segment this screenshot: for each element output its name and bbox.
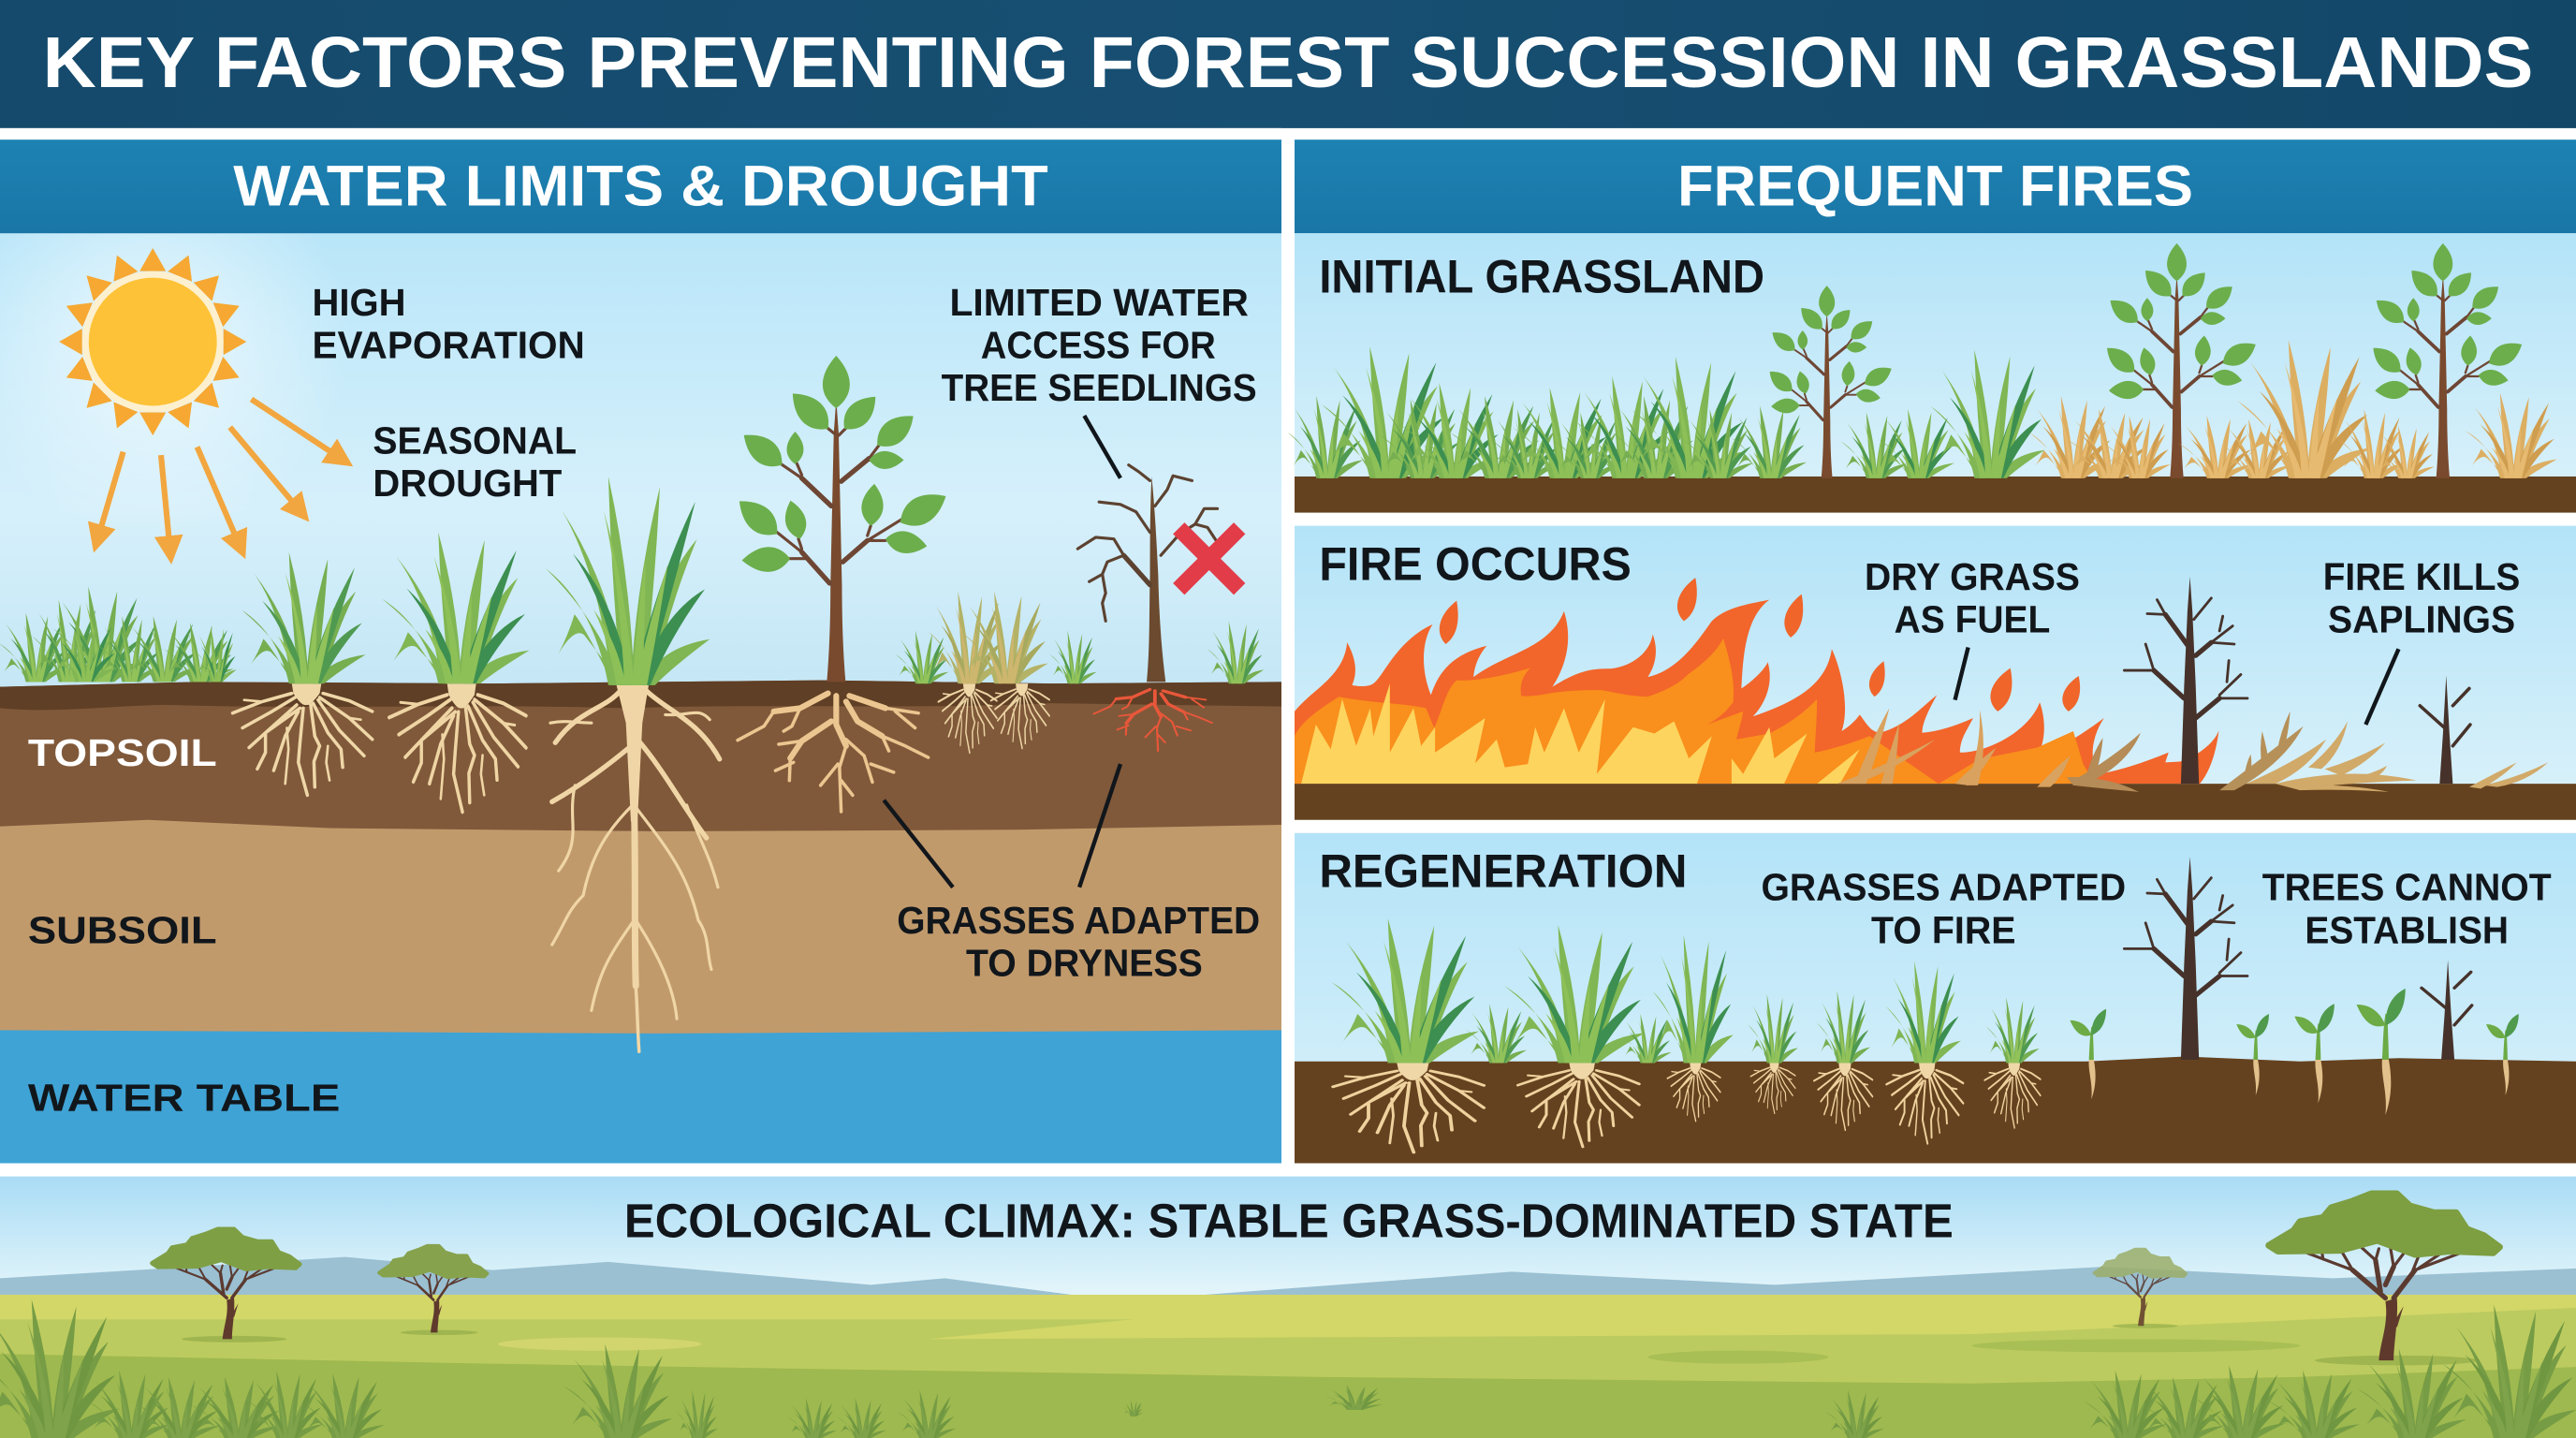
- grass bands: [0, 1295, 2576, 1438]
- sub-panel: fire occurs: [1295, 526, 2576, 820]
- sky: [0, 1177, 2576, 1308]
- dry grass with shallow roots: [895, 592, 1096, 753]
- grass with deep taproot: [546, 477, 720, 1051]
- sub-panel: initial grassland: INITIAL GRASSLAND: [1319, 250, 1764, 302]
- label: limited water access: TREE SEEDLINGS: [942, 366, 1257, 409]
- label: grasses adapted to fire: TO FIRE: [1871, 908, 2016, 951]
- section heading: water limits: [0, 128, 1281, 233]
- leader line: fuel: [1955, 647, 1969, 700]
- label: dry grass as fuel: AS FUEL: [1895, 598, 2050, 641]
- soil labels: WATER TABLE: [28, 1076, 340, 1119]
- fallen burnt saplings: [2219, 712, 2548, 792]
- foreground grass: [0, 1299, 2576, 1438]
- flames: [1295, 578, 2218, 784]
- sky background: [0, 144, 1281, 694]
- section heading: frequent fires: FREQUENT FIRES: [1677, 154, 2193, 218]
- icon: red x: [1173, 522, 1245, 594]
- panel: frequent fires: [1287, 139, 2576, 1164]
- grass with roots: short: [233, 552, 373, 795]
- arrows: sun rays: [95, 399, 348, 559]
- seedlings: [2070, 989, 2519, 1115]
- burnt trees: [2124, 857, 2472, 1060]
- label: fire kills saplings: SAPLINGS: [2328, 598, 2515, 641]
- label: dry grass as fuel: DRY GRASS: [1865, 555, 2080, 598]
- soil layers: [0, 681, 1281, 1164]
- soil labels: [28, 731, 340, 1119]
- dead tree seedling: [1077, 465, 1245, 751]
- acacia trees: [152, 1194, 2499, 1365]
- small grass row: [0, 587, 237, 682]
- label: high evaporation: HIGH: [312, 281, 406, 324]
- label: seasonal drought: DROUGHT: [373, 462, 563, 505]
- label: limited water access: ACCESS FOR: [981, 324, 1216, 367]
- label: grasses adapted to dryness: GRASSES ADAPTED: [897, 899, 1260, 942]
- label: fire kills saplings: FIRE KILLS: [2323, 555, 2520, 598]
- leader line: seedlings: [1084, 416, 1120, 478]
- green grass: [1287, 346, 2044, 478]
- burning dry grass: [1837, 708, 2141, 792]
- label: limited water access: LIMITED WATER: [949, 281, 1249, 324]
- label: grasses adapted to dryness: TO DRYNESS: [966, 941, 1203, 984]
- dry grass: [2029, 340, 2557, 478]
- panel: water limits and drought: [0, 128, 1281, 1164]
- sub-panel: regeneration: [1295, 833, 2576, 1164]
- soil labels: TOPSOIL: [28, 731, 217, 774]
- label: trees cannot establish: ESTABLISH: [2305, 908, 2509, 951]
- panel: ecological climax landscape: [0, 1177, 2576, 1438]
- leader lines: grasses adapted: [884, 764, 1120, 888]
- saplings: [1764, 243, 2526, 478]
- title: ECOLOGICAL CLIMAX: STABLE GRASS-DOMINATED STATE: [624, 1195, 1954, 1248]
- regrowing grass with roots: [1331, 918, 2041, 1152]
- distant hills: [0, 1257, 2576, 1306]
- title banner: KEY FACTORS PREVENTING FOREST SUCCESSION IN GRASSLANDS: [43, 22, 2533, 103]
- sub-panel: regeneration: REGENERATION: [1319, 845, 1687, 898]
- leader line: saplings: [2365, 649, 2398, 725]
- label: trees cannot establish: TREES CANNOT: [2262, 866, 2552, 909]
- icon: sun: [59, 248, 246, 435]
- small grass right: [1207, 621, 1264, 683]
- soil labels: SUBSOIL: [28, 908, 217, 951]
- burnt trees: [2124, 577, 2470, 784]
- healthy tree with roots: [731, 356, 953, 812]
- section heading: frequent fires: [1295, 139, 2576, 233]
- grass with roots: medium: [382, 533, 530, 812]
- label: grasses adapted to fire: GRASSES ADAPTED: [1761, 866, 2126, 909]
- title banner: [0, 0, 2576, 128]
- sub-panel: fire occurs: FIRE OCCURS: [1319, 538, 1632, 591]
- section heading: water limits: WATER LIMITS & DROUGHT: [233, 154, 1048, 218]
- label: high evaporation: EVAPORATION: [312, 324, 585, 367]
- label: seasonal drought: SEASONAL: [373, 418, 577, 462]
- sub-panel: initial grassland: [1287, 233, 2576, 513]
